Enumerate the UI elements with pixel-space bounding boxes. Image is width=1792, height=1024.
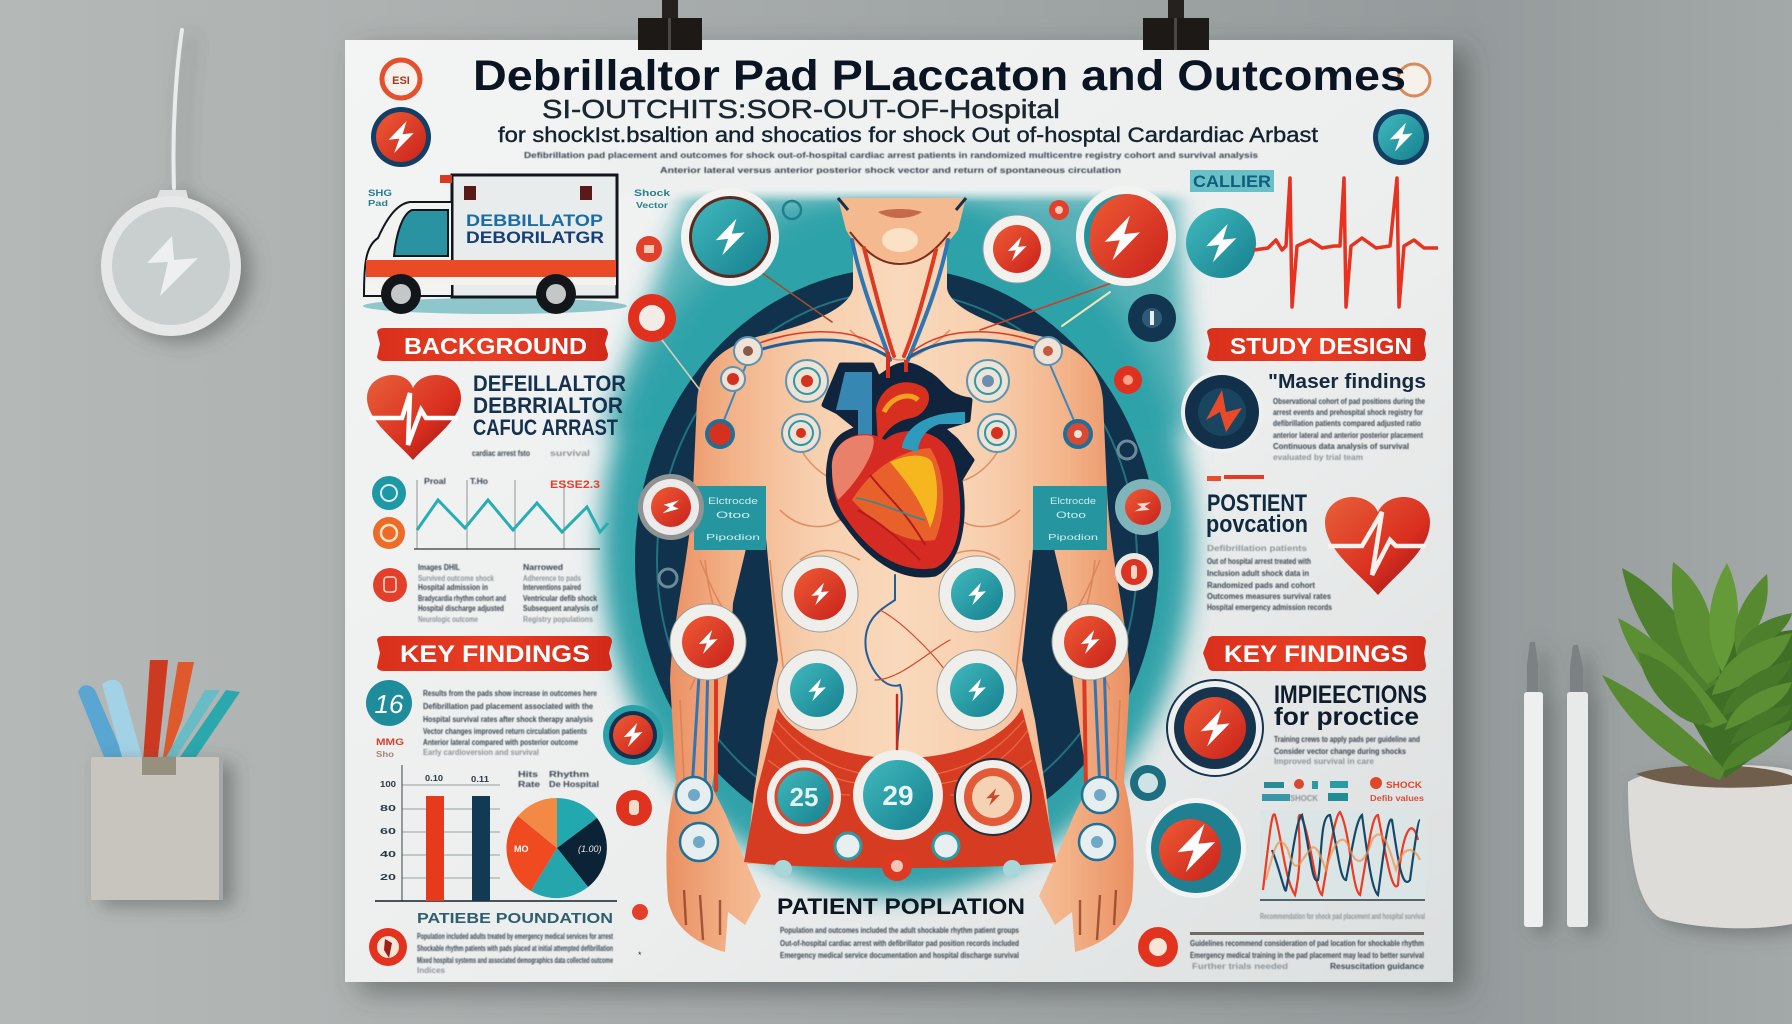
lower right small print: Further trials needed	[1192, 962, 1288, 971]
centre patient population text: Population and outcomes included the adult shockable rhythm patient groups	[780, 926, 1019, 935]
key findings banner right: KEY FINDINGS	[1224, 641, 1408, 668]
small lower badges	[774, 833, 1021, 881]
study design text: Observational cohort of pad positions during the	[1273, 397, 1425, 406]
background icons	[372, 476, 407, 602]
subtitle line one: SI-OUTCHITS:SOR-OUT-OF-Hospital	[542, 94, 1060, 124]
background text columns: Interventions paired	[523, 583, 581, 592]
lower right small print: Guidelines recommend consideration of pad location for shockable rhythm	[1190, 939, 1424, 948]
background text columns: Subsequent analysis of	[523, 604, 598, 613]
neck vessels	[752, 240, 1048, 360]
wrist and hand electrodes	[676, 777, 1118, 861]
pie chart	[506, 798, 607, 898]
pie legend: Rate	[518, 780, 541, 789]
key findings text	[423, 689, 597, 757]
teal pad beside ECG	[1186, 208, 1256, 278]
key findings text: Hospital survival rates after shock therapy analysis	[423, 715, 593, 724]
chest and shoulder electrodes	[705, 337, 1093, 452]
bottom centre marks	[638, 927, 1178, 967]
lower right small print: Emergency medical training in the pad placement may lead to better survival	[1190, 951, 1424, 960]
background line chart: Proal	[424, 477, 446, 486]
numbered pad with skin centre	[955, 759, 1031, 835]
ambulance: DEBORILATGR	[466, 228, 604, 247]
ambulance lettering: DEBBILLATOP	[466, 211, 603, 230]
inner teal arc ring	[657, 292, 1137, 828]
upper arm band right: Elctrocde	[1050, 496, 1096, 506]
upper arm band left: Pipodion	[706, 533, 760, 542]
key findings text: Results from the pads show increase in outcomes here	[423, 689, 597, 698]
implications text: Improved survival in care	[1274, 757, 1375, 766]
study design banner	[1207, 328, 1426, 361]
header icon bolt left	[371, 107, 431, 167]
subtitle line two: for shockIst.bsaltion and shocatios for shock Out of-hosptal Cardardiac Arbast	[498, 124, 1318, 147]
teal background field	[600, 150, 1220, 897]
pie legend	[518, 770, 599, 789]
key finding number badge	[366, 680, 412, 726]
wave chart legend	[1262, 777, 1425, 803]
small caption	[472, 449, 590, 458]
background text columns	[418, 563, 598, 624]
body torso and arms	[666, 240, 1134, 952]
binder clip right	[1143, 0, 1209, 50]
implications text	[1274, 735, 1420, 766]
binder clip left	[638, 0, 702, 50]
patient population right heading: POSTIENT	[1207, 490, 1307, 517]
small red markers right	[1114, 366, 1153, 591]
mid red pad top	[983, 215, 1051, 283]
lead wires	[662, 254, 1120, 790]
key findings text: Anterior lateral compared with posterior outcome	[423, 738, 578, 747]
ambulance ground shadow	[363, 298, 627, 314]
implications heading	[1274, 681, 1427, 731]
background banner	[377, 328, 608, 361]
pie legend: Hits	[518, 770, 539, 779]
small teal captions: Pad	[368, 199, 388, 208]
background text columns: Hospital admission in	[418, 583, 488, 592]
study design text: evaluated by trial team	[1273, 453, 1363, 462]
key finding number badge: 16	[375, 689, 404, 719]
pie legend: De Hospital	[549, 780, 599, 789]
wave chart legend: Defib values	[1370, 794, 1425, 803]
background text columns: Narrowed	[523, 563, 563, 572]
small red label	[376, 737, 404, 759]
side pad left	[638, 474, 704, 540]
implications icon	[1167, 680, 1263, 776]
key findings text: Defibrillation pad placement associated with the	[423, 702, 594, 711]
patient population right heading: povcation	[1206, 511, 1308, 538]
header icon ring	[382, 60, 420, 98]
bar chart: 0.10	[425, 774, 444, 783]
header small print: Anterior lateral versus anterior posterior shock vector and return of spontaneous circulation	[660, 166, 1121, 175]
patient population left text: Mixed hospital systems and associated demographics data collected outcome	[417, 956, 613, 965]
upper arm band right	[1033, 486, 1107, 550]
lower right small print: Resuscitation guidance	[1330, 962, 1425, 971]
bar chart: 60	[380, 827, 397, 836]
central anatomy illustration	[600, 150, 1220, 952]
centre patient population text: Out-of-hospital cardiac arrest with defibrillator pad position records included	[780, 939, 1019, 948]
study design banner: STUDY DESIGN	[1230, 333, 1412, 359]
header small print	[524, 151, 1259, 175]
bar chart	[375, 765, 617, 901]
background line chart	[414, 477, 608, 549]
key findings text: Vector changes improved return circulation patients	[423, 727, 587, 736]
wrist electrode centres	[688, 789, 1106, 848]
upper arm band left: Otoo	[716, 510, 750, 520]
wave chart legend: SHOCK	[1290, 794, 1318, 803]
small caption: cardiac arrest fsto	[472, 449, 530, 458]
key findings banner left: KEY FINDINGS	[400, 641, 590, 668]
key findings text: Early cardioversion and survival	[423, 748, 539, 757]
patient population left heading: PATIEBE POUNDATION	[417, 910, 613, 927]
small caption: survival	[550, 449, 590, 458]
navy circle	[635, 268, 1159, 852]
patient population right text: Randomized pads and cohort	[1207, 581, 1315, 590]
patient population right text: Hospital emergency admission records	[1207, 603, 1332, 612]
small icons around the head	[632, 200, 1069, 920]
large red pad top right	[1076, 186, 1176, 286]
pie legend: Rhythm	[549, 770, 589, 779]
bar chart: 80	[380, 804, 397, 813]
abdomen pad red	[782, 556, 858, 632]
abdomen pad teal lower left	[777, 650, 857, 730]
upper arm band right: Pipodion	[1048, 533, 1098, 542]
wave chart	[1260, 810, 1425, 900]
background line chart: T.Ho	[470, 477, 488, 486]
key findings banner left	[377, 636, 612, 671]
small teal captions: Shock	[634, 188, 671, 198]
header small print: Defibrillation pad placement and outcomes for shock out-of-hospital cardiac arrest patients in randomized multicentre registry cohort and survival analysis	[524, 151, 1259, 160]
key findings banner right	[1203, 636, 1426, 671]
large teal pad top left	[681, 188, 779, 286]
header icon ring: ESI	[392, 75, 410, 87]
wall cord and defibrillator disc	[101, 30, 241, 336]
centre patient population text	[780, 926, 1019, 960]
upper arm band left	[694, 486, 766, 550]
small red pad left	[616, 790, 652, 826]
arm pad right	[1052, 604, 1128, 680]
ambulance stripe	[366, 260, 616, 277]
ECG trace	[1254, 178, 1438, 307]
muscle shading lines	[680, 330, 1120, 940]
background heading text	[473, 371, 626, 440]
small red rule	[1207, 475, 1264, 481]
poster sheet	[345, 40, 1453, 982]
centre patient population heading: PATIENT POPLATION	[777, 894, 1025, 919]
ambulance	[363, 175, 627, 314]
small red label: Sho	[376, 750, 394, 759]
ambulance wheels	[381, 274, 576, 314]
implications heading: for proctice	[1274, 703, 1419, 731]
red ring marker	[628, 294, 676, 342]
potted plant	[1602, 562, 1792, 928]
bar chart: 40	[380, 850, 397, 859]
abdomen pad teal upper	[939, 556, 1015, 632]
small navy pad right	[1130, 765, 1166, 801]
heart	[824, 352, 972, 575]
lower right small print: Recommendation for shock pad placement and hospital survival	[1260, 912, 1425, 921]
study design text: defibrillation patients compared adjusted ratio	[1273, 419, 1421, 428]
study design heading: "Maser findings	[1268, 371, 1426, 393]
pen holder with pens	[78, 660, 240, 900]
lower right small print	[1190, 912, 1425, 971]
large shield pad	[1146, 798, 1246, 898]
title: Debrillaltor Pad PLaccaton and Outcomes	[473, 52, 1406, 100]
header icon bolt right	[1373, 109, 1429, 165]
background text columns: Neurologic outcome	[418, 615, 478, 624]
pie chart: MO	[514, 844, 528, 854]
numbered pad 29: 29	[882, 780, 914, 811]
implications heading: IMPIEECTIONS	[1274, 681, 1427, 709]
study design text: arrest events and prehospital shock registry for	[1273, 408, 1423, 417]
study design text: Continuous data analysis of survival	[1273, 442, 1409, 451]
side pad right	[1115, 479, 1171, 535]
upper arm band right: Otoo	[1056, 510, 1086, 520]
study design icon	[1181, 371, 1263, 453]
small red label: MMG	[376, 737, 404, 747]
header icon ring right	[1398, 64, 1430, 96]
background text columns: Registry populations	[523, 615, 593, 624]
ambulance window	[394, 210, 448, 256]
patient population left icon	[369, 928, 407, 966]
numbered pad 25: 25	[790, 782, 818, 812]
study design text: anterior lateral and anterior posterior placement	[1273, 431, 1423, 440]
patient population left text: Population included adults treated by emergency medical services for arrest	[417, 932, 613, 941]
small label above ECG: CALLIER	[1193, 172, 1271, 191]
study design text	[1273, 397, 1425, 462]
background heart icon	[367, 375, 461, 460]
background line chart: ESSE2.3	[550, 479, 600, 491]
implications text: Consider vector change during shocks	[1274, 747, 1406, 756]
pie chart: (1.00)	[578, 844, 602, 854]
wave chart legend: SHOCK	[1386, 780, 1423, 790]
background text columns: Survived outcome shock	[418, 574, 494, 583]
abdomen pad teal lower right	[937, 650, 1017, 730]
patient population right text: Out of hospital arrest treated with	[1207, 557, 1311, 566]
bar chart: 0.11	[471, 775, 490, 784]
shorts fold lines	[768, 720, 1032, 795]
bar chart: 20	[380, 873, 397, 882]
background text columns: Hospital discharge adjusted	[418, 604, 504, 613]
shorts	[744, 708, 1056, 868]
background heading text: DEBRRIALTOR	[473, 393, 623, 418]
bar chart: 100	[380, 780, 397, 789]
background text columns: Adherence to pads	[523, 574, 581, 583]
numbered pad 25	[767, 760, 841, 834]
implications text: Training crews to apply pads per guideline and	[1274, 735, 1420, 744]
arm pad left	[670, 604, 746, 680]
background text columns: Bradycardia rhythm cohort and	[418, 594, 506, 603]
centre patient population text: Emergency medical service documentation and hospital discharge survival	[780, 951, 1019, 960]
face and neck	[838, 198, 966, 264]
white pens	[1524, 642, 1588, 927]
background text columns: Ventricular defib shock	[523, 594, 597, 603]
small teal captions: Vector	[636, 201, 668, 210]
ambulance cab	[364, 202, 452, 296]
patient population right heading	[1206, 490, 1308, 538]
small teal captions: SHG	[368, 188, 392, 198]
background banner: BACKGROUND	[404, 333, 587, 359]
patient population right text	[1207, 544, 1332, 612]
navy marker	[1128, 294, 1176, 342]
patient population left text	[417, 932, 613, 975]
dark small rings on the arc	[659, 441, 1136, 587]
background heading text: DEFEILLALTOR	[473, 371, 626, 396]
patient population right text: Outcomes measures survival rates	[1207, 592, 1332, 601]
patient population right text: Defibrillation patients	[1207, 544, 1308, 553]
background heading text: CAFUC ARRAST	[473, 415, 618, 440]
upper arm band left: Elctrocde	[708, 496, 758, 506]
background text columns: Images DHIL	[418, 563, 460, 572]
patient population left text: Shockable rhythm patients with pads placed at initial attempted defibrillation	[417, 944, 613, 953]
numbered pad 29	[853, 750, 943, 840]
small teal captions	[368, 188, 671, 210]
patient population left text: Indices	[417, 966, 446, 975]
patient population right text: Inclusion adult shock data in	[1207, 569, 1309, 578]
pad beside key findings left	[603, 705, 663, 765]
right heart icon	[1325, 497, 1430, 595]
bottom centre marks: *	[638, 950, 642, 960]
ambulance box	[452, 175, 617, 297]
